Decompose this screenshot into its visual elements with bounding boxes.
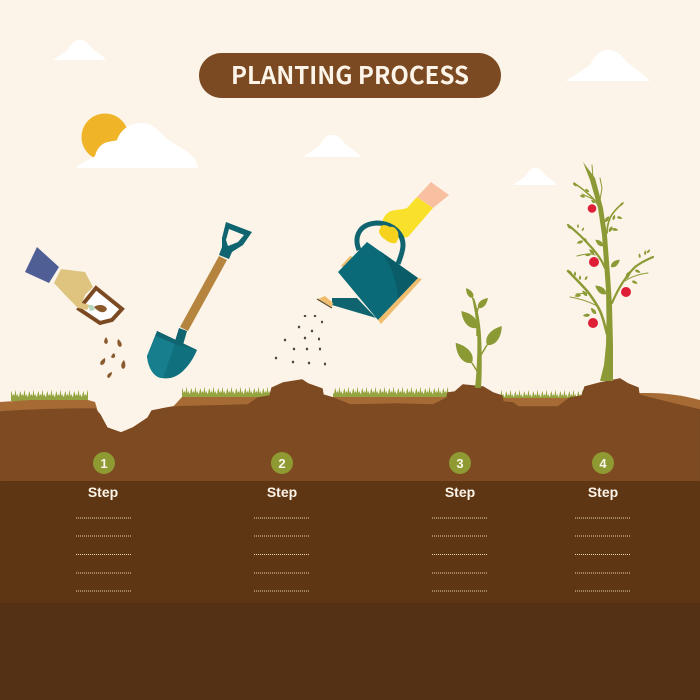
icon: apples xyxy=(588,204,631,328)
icon: thumb tip xyxy=(88,305,95,311)
cloud: centre xyxy=(303,135,361,157)
step 3 badge: 3 xyxy=(456,456,464,471)
light topsoil layer: centre right xyxy=(498,398,584,410)
step 4 badge xyxy=(592,452,614,474)
step 1 label: Step xyxy=(88,484,118,500)
icon: blade top edge xyxy=(156,331,197,350)
soil band with planting hole and mounds xyxy=(0,379,700,482)
icon: can handle xyxy=(357,223,403,264)
icon: hand xyxy=(54,269,93,310)
step 3 label: Step xyxy=(445,484,475,500)
step 1 badge xyxy=(93,452,115,474)
grass strips xyxy=(11,386,584,401)
icon: branches xyxy=(568,165,653,334)
icon: rear grip xyxy=(341,256,353,270)
icon: seed packet xyxy=(79,288,122,323)
step 2 badge: 2 xyxy=(278,456,286,471)
cloud: top right xyxy=(566,50,650,81)
icon: falling seeds xyxy=(100,337,125,378)
step 1 text lines xyxy=(76,518,131,591)
step 1: shovel xyxy=(147,222,252,378)
step 1 badge: 1 xyxy=(100,456,108,471)
step 4 text lines xyxy=(575,518,631,591)
icon: sun xyxy=(82,114,128,160)
light topsoil layer: right xyxy=(636,393,700,415)
icon: blade light half xyxy=(147,335,175,378)
icon: nozzle rose xyxy=(317,299,332,308)
title banner: PLANTING PROCESS xyxy=(231,56,469,91)
step 4 label: Step xyxy=(588,484,618,500)
step 2 label: Step xyxy=(267,484,297,500)
icon: can shade xyxy=(380,251,418,299)
icon: nozzle xyxy=(318,296,333,307)
icon: wrist xyxy=(417,182,449,208)
step 2 badge xyxy=(271,452,293,474)
step 4: fruit tree xyxy=(566,162,653,381)
step 3 text lines xyxy=(432,518,488,591)
icon: stem xyxy=(472,298,482,388)
icon: sleeve xyxy=(25,247,59,283)
light topsoil layer: centre xyxy=(333,397,450,408)
light topsoil layer: centre left xyxy=(170,397,262,410)
step 3: sapling xyxy=(451,287,506,388)
icon: packet seed xyxy=(94,305,107,312)
icon: can body xyxy=(338,242,418,320)
icon: tree leaves xyxy=(566,183,651,317)
title banner xyxy=(199,53,501,98)
step 4 badge: 4 xyxy=(599,456,607,471)
cloud: top left xyxy=(53,40,106,60)
step 2 text lines xyxy=(254,518,310,591)
icon: blade xyxy=(147,331,197,378)
cloud: in front of sun xyxy=(76,123,198,168)
light topsoil layer: left xyxy=(0,400,98,414)
step 3 badge xyxy=(449,452,471,474)
step 1: seed hand xyxy=(25,247,122,323)
icon: glove fingers xyxy=(379,225,398,243)
dark soil band xyxy=(0,481,700,604)
icon: glove xyxy=(382,197,433,240)
icon: trunk xyxy=(583,162,613,381)
icon: shaft xyxy=(180,256,227,331)
step 2: watering can xyxy=(317,182,449,324)
icon: sapling leaves xyxy=(464,287,475,300)
cloud: right small xyxy=(513,168,557,185)
deepest soil band xyxy=(0,603,700,700)
icon: can base xyxy=(378,278,422,324)
icon: spout xyxy=(332,298,376,318)
icon: grip xyxy=(219,222,252,259)
icon: water drops xyxy=(275,315,326,366)
icon: blade neck xyxy=(175,328,187,345)
